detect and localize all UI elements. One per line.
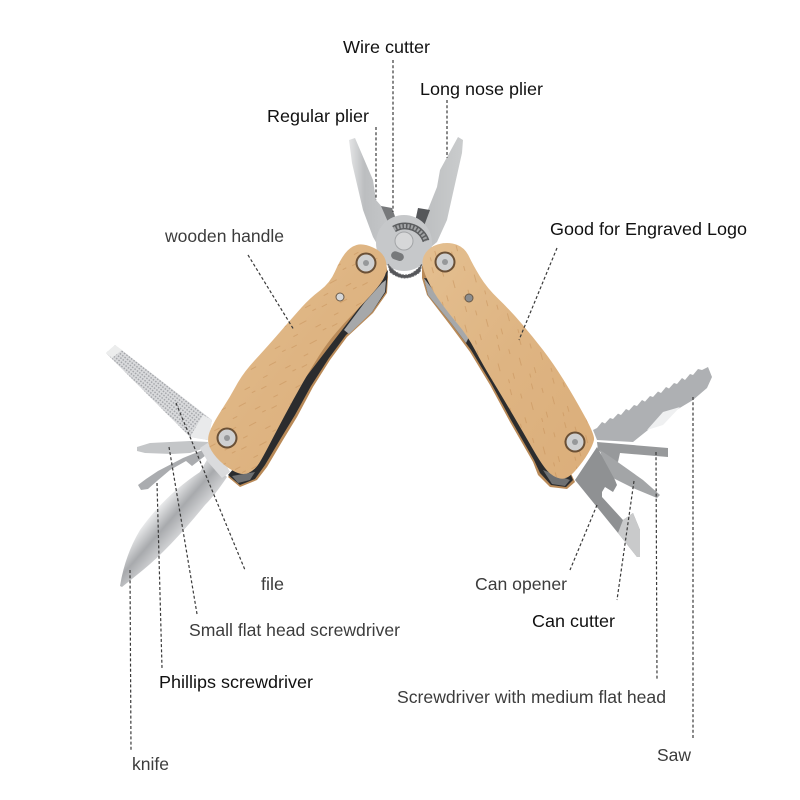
label: saw: Saw — [657, 745, 691, 765]
leader line: wooden handle — [248, 255, 294, 330]
right tools: saw, screwdriver, can cutter, can opener — [575, 367, 712, 557]
label: knife: knife — [132, 754, 169, 774]
leader line: phillips screwdriver — [157, 483, 162, 668]
small flat head screwdriver — [137, 441, 208, 454]
medium flat head screwdriver — [597, 442, 668, 462]
file — [106, 345, 212, 440]
leader line: small flat head screwdriver — [169, 447, 197, 614]
label: wire cutter: Wire cutter — [343, 37, 430, 57]
right wooden handle — [422, 243, 594, 479]
leader line: engraved logo — [519, 248, 557, 340]
leader line: regular plier — [375, 127, 377, 200]
tool root plate — [200, 440, 230, 478]
left frame — [228, 255, 388, 487]
wire cutter notches — [381, 206, 430, 226]
leader line: medium flat head screwdriver — [656, 452, 657, 680]
leader line: wire cutter — [392, 60, 394, 212]
spring — [388, 264, 422, 278]
saw — [593, 367, 712, 442]
knife blade — [120, 458, 227, 587]
label: small flat head screwdriver: Small flat head screwdriver — [189, 620, 400, 640]
leader line: can opener — [570, 505, 597, 570]
leader line: file — [176, 403, 245, 570]
left tools: file, screwdrivers and knife — [106, 345, 230, 587]
label: can opener: Can opener — [475, 574, 567, 594]
label: good for engraved logo: Good for Engraved Logo — [550, 219, 747, 239]
label: regular plier: Regular plier — [267, 106, 369, 126]
label: file: file — [261, 574, 284, 594]
handle screws — [216, 252, 586, 452]
leader line: saw — [692, 397, 694, 738]
leader line: knife — [130, 570, 131, 750]
inner frames behind the handles — [228, 255, 575, 489]
wooden handles — [208, 243, 594, 479]
label: wooden handle: wooden handle — [164, 226, 284, 246]
long nose plier jaw — [410, 137, 463, 252]
label: phillips screwdriver: Phillips screwdriver — [159, 672, 313, 692]
left wooden handle — [208, 244, 387, 474]
can opener — [575, 447, 640, 557]
label: long nose plier: Long nose plier — [420, 79, 543, 99]
label: can cutter: Can cutter — [532, 611, 615, 631]
right frame — [422, 265, 575, 489]
pliers — [349, 137, 463, 278]
phillips screwdriver — [138, 449, 210, 490]
label: screwdriver with medium flat head: Screwdriver with medium flat head — [397, 687, 666, 707]
leader line: can cutter — [617, 481, 634, 600]
pivot hub — [376, 215, 432, 271]
can cutter — [600, 450, 660, 498]
leader line: long nose plier — [446, 100, 448, 158]
regular plier jaw — [349, 138, 400, 262]
